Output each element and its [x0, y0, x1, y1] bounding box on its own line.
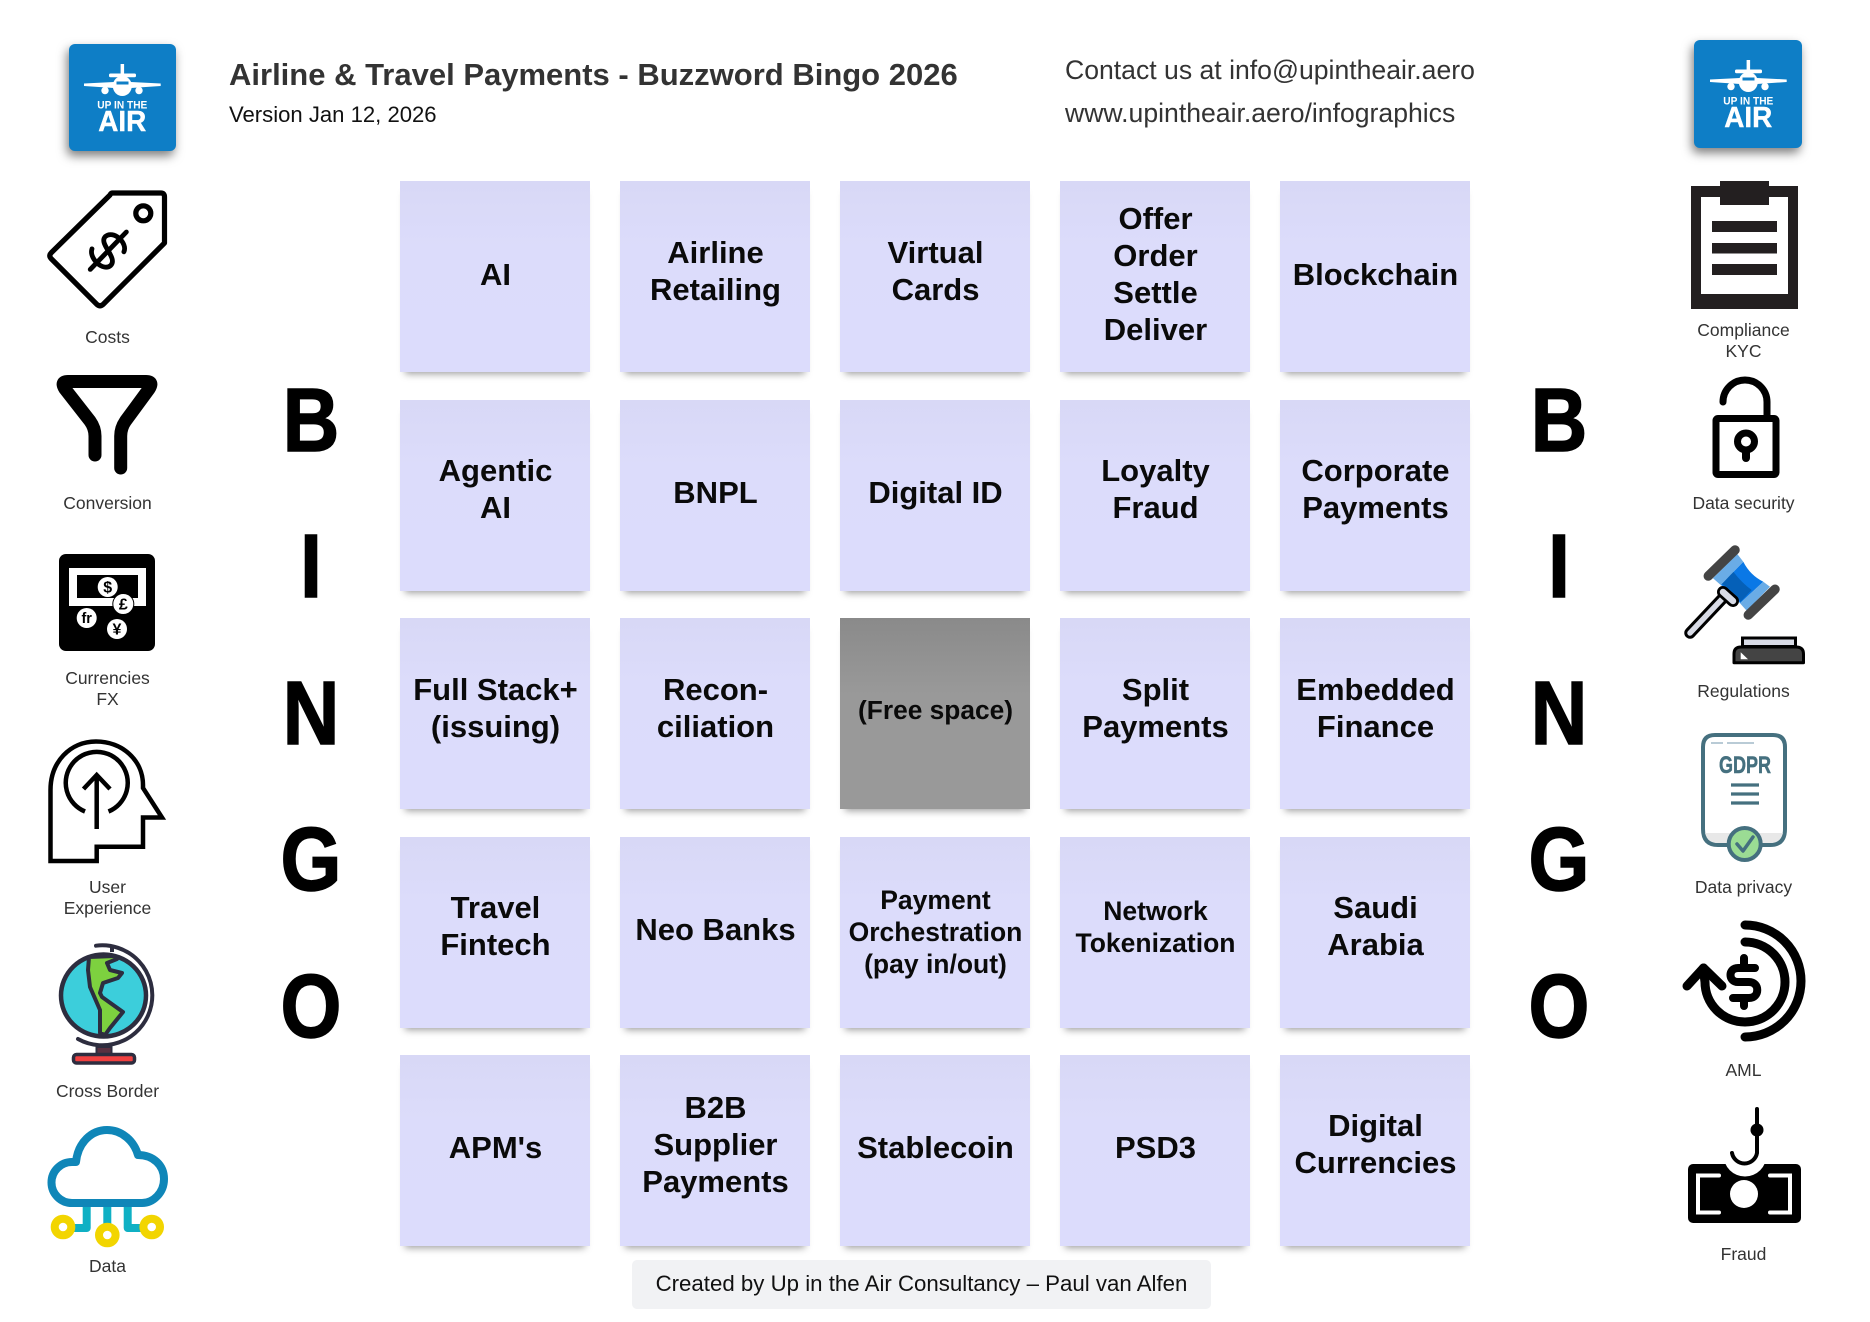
card: Payment Orchestration: Payment	[880, 885, 991, 915]
card: Agentic AI: Agentic	[439, 452, 552, 488]
logo: right: AIR	[1724, 102, 1772, 134]
icon: Costs price tag	[50, 193, 165, 306]
card: Free space	[840, 618, 1030, 809]
icon: Currencies FX: $	[103, 580, 112, 596]
card: Loyalty Fraud	[1060, 400, 1250, 591]
card: BNPL	[620, 400, 810, 591]
label: User Experience: User	[89, 877, 126, 897]
card: AI	[400, 181, 590, 372]
logo: left: UP IN THE	[97, 100, 147, 112]
card: Blockchain: Blockchain	[1293, 257, 1458, 292]
BINGO letters: right: O	[1529, 957, 1589, 1057]
logo: right: UP IN THE	[1723, 96, 1773, 108]
BINGO letters: right: N	[1531, 664, 1587, 764]
label: Compliance KYC: Compliance	[1697, 320, 1790, 340]
card: B2B Supplier Payments: Supplier	[653, 1127, 778, 1162]
card: Travel Fintech: Travel	[451, 890, 540, 924]
card: Payment Orchestration: Orchestration	[849, 917, 1022, 947]
contact details	[1065, 55, 1475, 128]
card: Offer Order Settle Deliver: Deliver	[1104, 312, 1207, 347]
card: Full Stack+ (issuing): Full Stack+	[413, 672, 578, 706]
BINGO letters: left: B	[283, 371, 339, 471]
card: PSD3: PSD3	[1115, 1130, 1196, 1164]
card: Embedded Finance: Finance	[1317, 708, 1434, 744]
icon: Data privacy GDPR document	[1703, 735, 1785, 860]
card: Saudi Arabia	[1280, 837, 1470, 1028]
card: PSD3	[1060, 1055, 1250, 1246]
footer credit	[632, 1260, 1211, 1309]
card: Agentic AI: AI	[480, 490, 511, 524]
card: Digital ID: Digital ID	[868, 474, 1003, 510]
icon: Conversion funnel	[63, 382, 151, 468]
card: Split Payments	[1060, 618, 1250, 809]
card: Travel Fintech: Fintech	[440, 926, 551, 962]
card: Reconciliation: Recon-	[663, 672, 768, 706]
label: Data security: Data security	[1692, 493, 1795, 513]
card: Payment Orchestration: (pay in/out)	[864, 949, 1007, 979]
BINGO letters: left: N	[283, 664, 339, 764]
card: B2B Supplier Payments: B2B	[684, 1090, 746, 1125]
BINGO letters: left: G	[281, 810, 341, 910]
BINGO letters: left: I	[300, 517, 322, 617]
logo: left: AIR	[98, 106, 146, 138]
card: Blockchain	[1280, 181, 1470, 372]
label: Fraud: Fraud	[1721, 1244, 1766, 1264]
icon: Data cloud	[52, 1130, 164, 1243]
contact details: Contact us at info@upintheair.aero	[1065, 55, 1475, 85]
label: Data privacy: Data privacy	[1695, 877, 1792, 897]
card: B2B Supplier Payments	[620, 1055, 810, 1246]
label: Regulations: Regulations	[1697, 681, 1790, 701]
icon: Compliance clipboard	[1691, 181, 1798, 309]
card: Offer Order Settle Deliver	[1060, 181, 1250, 372]
card: Network Tokenization: Network	[1103, 896, 1208, 926]
BINGO letters: right: I	[1548, 517, 1570, 617]
card: Neo Banks	[620, 837, 810, 1028]
icon: Cross Border globe	[61, 945, 152, 1063]
card: Loyalty Fraud: Fraud	[1112, 490, 1199, 524]
icon: User Experience head	[50, 742, 162, 861]
footer credit: Created by Up in the Air Consultancy – Paul van Alfen	[656, 1271, 1187, 1296]
icon: Data privacy GDPR document: GDPR	[1719, 752, 1771, 779]
BINGO letters: right: B	[1531, 371, 1587, 471]
BINGO letters: left	[281, 371, 341, 1057]
card: Full Stack+ (issuing): (issuing)	[431, 708, 560, 744]
card: Airline Retailing	[620, 181, 810, 372]
label: Data: Data	[89, 1256, 126, 1276]
card: Offer Order Settle Deliver: Offer	[1118, 201, 1193, 236]
icon: Fraud hook and banknote	[1688, 1109, 1801, 1223]
BINGO letters: left: O	[281, 957, 341, 1057]
card: Stablecoin: Stablecoin	[857, 1130, 1014, 1164]
label: Currencies FX: FX	[96, 689, 119, 709]
version: Version Jan 12, 2026	[229, 102, 437, 127]
label: Cross Border: Cross Border	[56, 1081, 159, 1101]
card: Embedded Finance	[1280, 618, 1470, 809]
card: Airline Retailing: Retailing	[650, 272, 781, 306]
card: Airline Retailing: Airline	[667, 234, 764, 270]
card: Offer Order Settle Deliver: Settle	[1113, 275, 1198, 310]
label: Conversion: Conversion	[63, 493, 152, 513]
card: Network Tokenization	[1060, 837, 1250, 1028]
card: Virtual Cards	[840, 181, 1030, 372]
logo: right	[1694, 40, 1802, 148]
card: Offer Order Settle Deliver: Order	[1113, 238, 1198, 273]
icon: Data security padlock	[1716, 380, 1776, 474]
card: Network Tokenization: Tokenization	[1076, 928, 1235, 958]
card: Full Stack+ (issuing)	[400, 618, 590, 809]
label: Currencies FX: Currencies	[65, 668, 150, 688]
card: APM's: APM's	[449, 1130, 542, 1164]
card: Reconciliation: ciliation	[657, 708, 774, 744]
BINGO letters: right: G	[1529, 810, 1589, 910]
card: Embedded Finance: Embedded	[1296, 672, 1455, 706]
card: Corporate Payments: Payments	[1302, 490, 1449, 524]
card: Corporate Payments: Corporate	[1301, 452, 1450, 488]
BINGO letters: right	[1529, 371, 1589, 1057]
icon: Regulations gavel	[1690, 550, 1804, 663]
card: Agentic AI	[400, 400, 590, 591]
card: Digital Currencies: Currencies	[1295, 1144, 1456, 1180]
card: Split Payments: Payments	[1082, 708, 1229, 744]
icon: Currencies FX: ¥	[113, 622, 122, 638]
card: AI: AI	[480, 257, 511, 292]
icon: Currencies FX	[59, 554, 155, 651]
card: Digital Currencies: Digital	[1328, 1108, 1423, 1142]
icon: Currencies FX: £	[119, 596, 128, 614]
label: Compliance KYC: KYC	[1726, 341, 1761, 361]
card: Reconciliation	[620, 618, 810, 809]
card: Loyalty Fraud: Loyalty	[1101, 452, 1210, 488]
card: Stablecoin	[840, 1055, 1030, 1246]
card: APM's	[400, 1055, 590, 1246]
title: Airline & Travel Payments - Buzzword Bingo 2026	[229, 57, 958, 92]
card: Payment Orchestration	[840, 837, 1030, 1028]
card: B2B Supplier Payments: Payments	[642, 1164, 789, 1199]
label: AML: AML	[1726, 1060, 1762, 1080]
card: Neo Banks: Neo Banks	[635, 912, 796, 946]
logo: left	[69, 44, 176, 151]
card: Free space: (Free space)	[858, 694, 1013, 724]
card: Virtual Cards: Virtual	[888, 234, 983, 270]
card: Split Payments: Split	[1122, 672, 1189, 706]
icon: Currencies FX: fr	[81, 611, 92, 627]
icon: AML dollar arrow	[1687, 925, 1801, 1037]
card: Corporate Payments	[1280, 400, 1470, 591]
card: BNPL: BNPL	[673, 474, 758, 510]
bingo card grid	[400, 181, 1470, 1253]
card: Travel Fintech	[400, 837, 590, 1028]
card: Saudi Arabia: Arabia	[1327, 926, 1424, 962]
card: Digital ID	[840, 400, 1030, 591]
card: Saudi Arabia: Saudi	[1333, 890, 1418, 924]
contact details: www.upintheair.aero/infographics	[1065, 98, 1455, 128]
card: Digital Currencies	[1280, 1055, 1470, 1246]
card: Virtual Cards: Cards	[892, 272, 979, 306]
label: Costs: Costs	[85, 327, 130, 347]
label: User Experience: Experience	[64, 898, 151, 918]
